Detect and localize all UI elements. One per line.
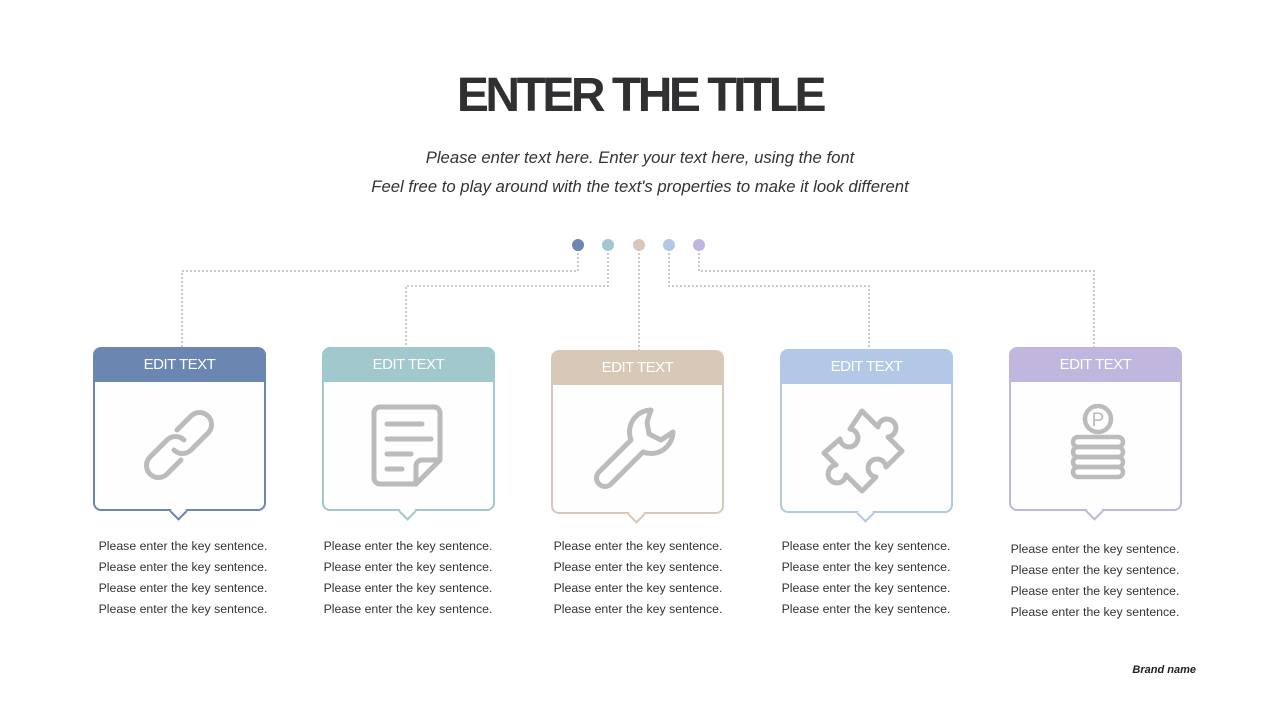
card 1: link: EDIT TEXT <box>144 356 215 373</box>
icon: coins: P <box>1092 410 1104 431</box>
text 3: Please enter the key sentence. <box>554 602 722 616</box>
card 4: puzzle <box>780 349 953 513</box>
text 3: Please enter the key sentence. <box>554 539 722 553</box>
brand name: Brand name <box>1132 664 1196 676</box>
icon: wrench <box>594 408 676 489</box>
subtitle: Please enter text here. Enter your text here, using the font <box>426 148 854 167</box>
text 4: Please enter the key sentence. <box>782 539 950 553</box>
connectors <box>181 239 1095 350</box>
text 2: Please enter the key sentence. <box>324 560 492 574</box>
card 2: document: EDIT TEXT <box>373 356 444 373</box>
icon: document <box>372 404 442 486</box>
text 5: Please enter the key sentence. <box>1011 584 1179 598</box>
text 5 <box>1011 542 1179 619</box>
card 2: document <box>322 347 495 511</box>
text 2: Please enter the key sentence. <box>324 602 492 616</box>
text 4: Please enter the key sentence. <box>782 581 950 595</box>
card 3: wrench <box>551 350 724 514</box>
subtitle: Feel free to play around with the text's properties to make it look different <box>371 177 909 196</box>
icon: puzzle <box>822 408 904 494</box>
text 1: Please enter the key sentence. <box>99 560 267 574</box>
title: ENTER THE TITLE <box>457 69 823 122</box>
text 2: Please enter the key sentence. <box>324 581 492 595</box>
card 5: coins: EDIT TEXT <box>1060 356 1131 373</box>
text 4: Please enter the key sentence. <box>782 560 950 574</box>
text 1: Please enter the key sentence. <box>99 539 267 553</box>
text 4 <box>782 539 950 616</box>
card 1: link <box>93 347 266 511</box>
text 2: Please enter the key sentence. <box>324 539 492 553</box>
text 1 <box>99 539 267 616</box>
text 3 <box>554 539 722 616</box>
text 3: Please enter the key sentence. <box>554 581 722 595</box>
text 3: Please enter the key sentence. <box>554 560 722 574</box>
icon: link <box>144 410 214 480</box>
card 4: puzzle: EDIT TEXT <box>831 358 902 375</box>
text 1: Please enter the key sentence. <box>99 581 267 595</box>
card 5: coins <box>1009 347 1182 511</box>
text 5: Please enter the key sentence. <box>1011 563 1179 577</box>
text 2 <box>324 539 492 616</box>
icon: coins <box>1070 404 1126 480</box>
card 3: wrench: EDIT TEXT <box>602 359 673 376</box>
text 5: Please enter the key sentence. <box>1011 605 1179 619</box>
subtitle <box>371 148 910 196</box>
text 1: Please enter the key sentence. <box>99 602 267 616</box>
text 4: Please enter the key sentence. <box>782 602 950 616</box>
text 5: Please enter the key sentence. <box>1011 542 1179 556</box>
